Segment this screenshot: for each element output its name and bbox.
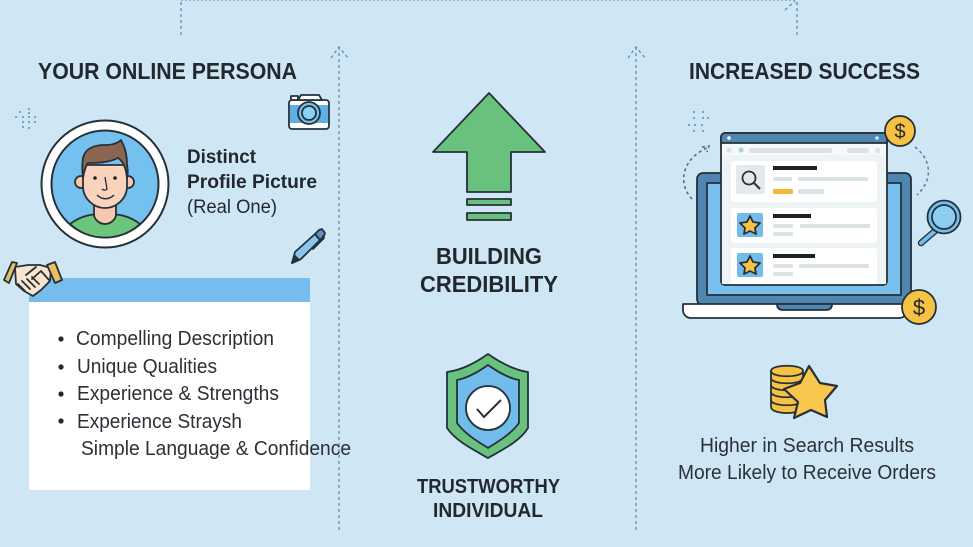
text: distinct profile picture: Profile Picture	[187, 172, 317, 193]
icon: shield with check	[447, 354, 528, 458]
result card: star one	[731, 208, 877, 243]
list: qualities: Compelling Description	[76, 328, 274, 350]
list: qualities	[58, 328, 351, 460]
panel: increased success	[678, 58, 960, 484]
icon: dollar coin top: $	[894, 121, 906, 143]
icon: magnifying glass	[921, 200, 960, 243]
text: search results outcome: Higher in Search Results	[700, 435, 914, 457]
heading: building credibility: CREDIBILITY	[420, 271, 558, 297]
list: qualities: Experience & Strengths	[77, 383, 279, 405]
icon: laptop with search results	[683, 133, 911, 318]
list: qualities: Experience Straysh	[77, 411, 242, 433]
heading: your online persona: YOUR ONLINE PERSONA	[38, 58, 297, 84]
result card: star two	[731, 248, 877, 284]
heading: building credibility	[420, 243, 558, 297]
icon: coin stack and star	[771, 366, 837, 418]
panel: building credibility	[417, 93, 561, 522]
arrow: dashed curve right	[915, 147, 928, 195]
heading: building credibility: BUILDING	[436, 243, 542, 269]
icon: handshake	[4, 262, 62, 296]
icon: sparkle dots	[688, 111, 709, 132]
text: search results outcome: More Likely to Receive Orders	[678, 462, 936, 484]
heading: trustworthy individual: INDIVIDUAL	[433, 500, 543, 522]
arrow: dashed curve left	[684, 146, 709, 199]
card header band	[29, 278, 310, 302]
icon: dollar coin bottom	[902, 290, 936, 324]
icon: profile avatar	[42, 120, 168, 248]
heading: trustworthy individual: TRUSTWORTHY	[417, 476, 561, 498]
list: qualities: Unique Qualities	[77, 356, 217, 378]
icon: sparkle dots	[15, 108, 36, 129]
result card: search	[731, 161, 877, 202]
panel: your online persona	[4, 58, 351, 490]
icon: dollar coin bottom: $	[913, 295, 925, 320]
panel: description card	[29, 278, 351, 490]
icon: pen	[292, 229, 325, 263]
text: distinct profile picture	[187, 147, 317, 218]
heading: increased success: INCREASED SUCCESS	[689, 58, 920, 84]
icon: camera	[289, 95, 329, 129]
text: search results outcome	[678, 435, 936, 484]
heading: trustworthy individual	[417, 476, 561, 522]
text: distinct profile picture: Distinct	[187, 147, 257, 168]
browser window	[721, 133, 887, 285]
list: qualities: Simple Language & Confidence	[81, 438, 351, 460]
icon: green up arrow	[433, 93, 545, 220]
text: distinct profile picture: (Real One)	[187, 197, 277, 218]
icon: dollar coin top	[885, 116, 915, 146]
